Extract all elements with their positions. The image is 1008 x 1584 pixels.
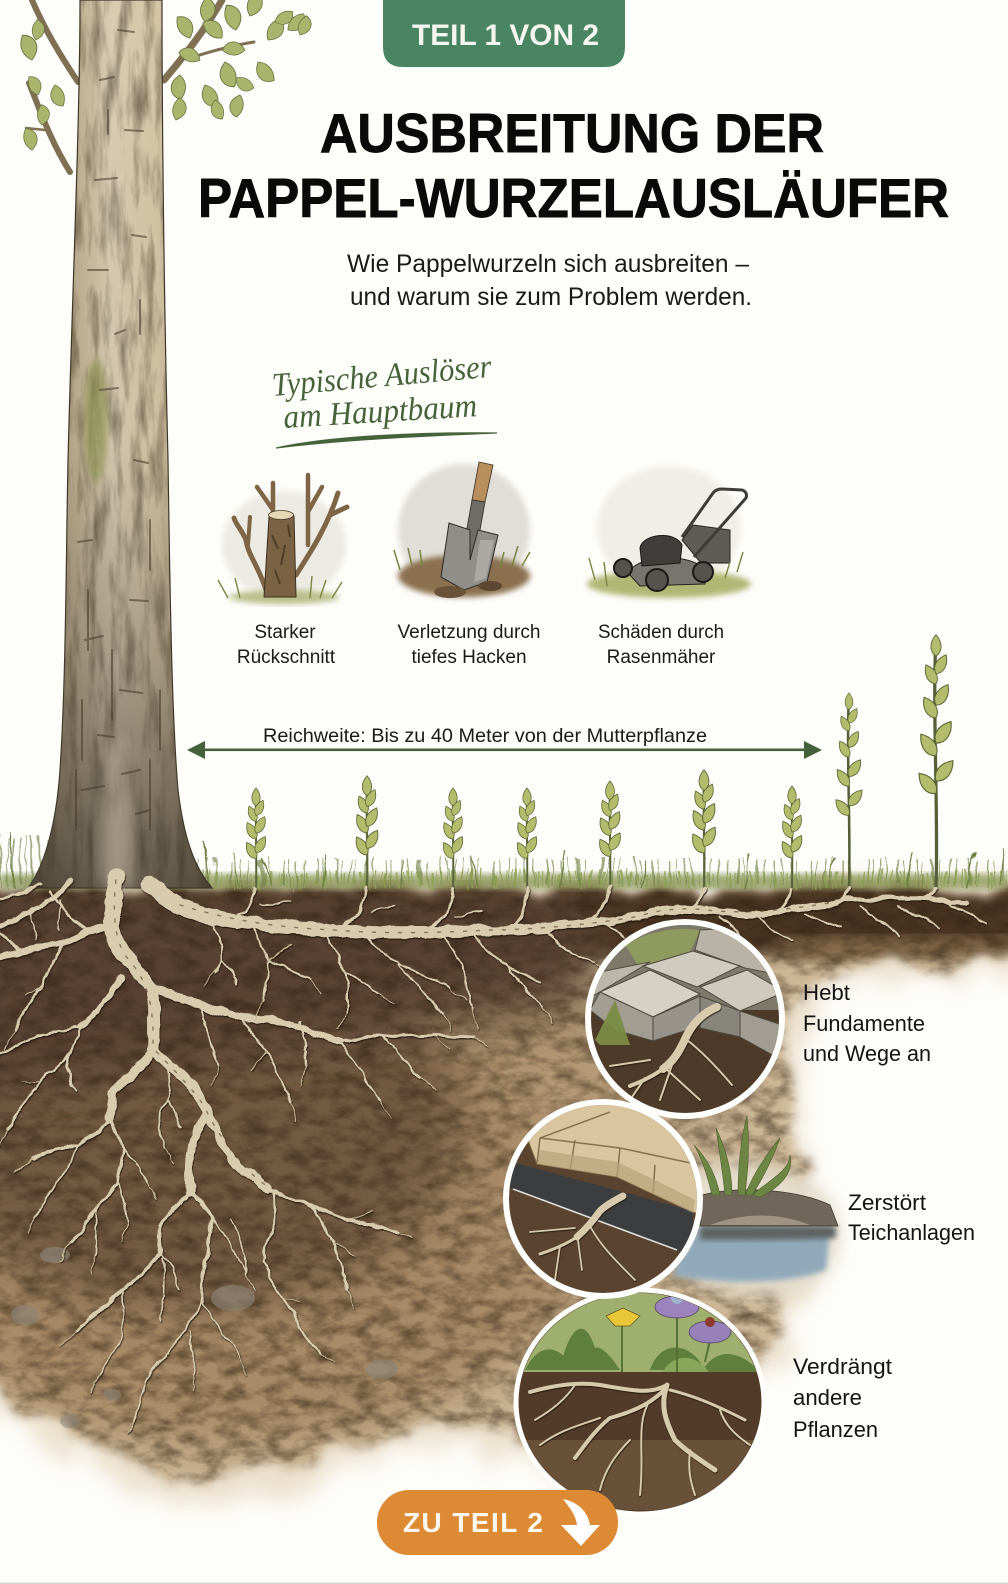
root suckers saplings <box>243 635 958 888</box>
flowers <box>606 1292 731 1343</box>
trigger label 2: tiefes Hacken <box>411 647 527 668</box>
effect label 2: Zerstört <box>848 1190 926 1215</box>
root flares from trunk base <box>0 882 72 940</box>
next part button: ZU TEIL 2 <box>403 1507 543 1538</box>
icon: pruned stump <box>218 475 347 604</box>
next part button <box>377 1490 618 1555</box>
moss patch <box>84 358 108 482</box>
effect label 1: Hebt <box>803 980 850 1005</box>
inset: pond liner <box>505 1100 700 1296</box>
trigger label 3: Rasenmäher <box>607 647 716 668</box>
bark marks <box>76 30 160 830</box>
handwritten heading: triggers <box>271 349 497 448</box>
icon: spade <box>394 462 530 598</box>
title: PAPPEL-WURZELAUSLÄUFER <box>198 167 949 229</box>
trigger label 1 <box>237 622 336 668</box>
trigger label 3 <box>598 622 724 668</box>
handwritten heading: triggers: Typische Auslöser <box>271 349 493 404</box>
taproot <box>77 876 397 1421</box>
circle ring <box>588 922 782 1116</box>
inset: pond surroundings <box>672 1116 840 1297</box>
inset: plants and roots <box>514 1288 765 1512</box>
left lower branches <box>33 1048 182 1255</box>
ellipse ring <box>516 1290 764 1514</box>
effect label 3: andere <box>793 1385 862 1410</box>
effect label 2: Teichanlagen <box>848 1220 975 1245</box>
trigger label 1: Starker <box>254 622 316 643</box>
upper right branch <box>155 990 473 1100</box>
handwritten heading: triggers: am Hauptbaum <box>282 388 478 436</box>
icon: curved arrow <box>561 1499 600 1546</box>
trigger label 2: Verletzung durch <box>398 622 540 643</box>
ground grass <box>0 832 1008 889</box>
runner side branches <box>212 900 984 1013</box>
soil cross-section <box>0 880 1008 1518</box>
effect label 3: Pflanzen <box>793 1417 878 1442</box>
main poplar tree <box>19 0 315 890</box>
part badge: TEIL 1 VON 2 <box>412 19 599 52</box>
pale root flare on trunk <box>100 740 134 888</box>
inset: lifted paving <box>585 920 785 1116</box>
range label: Reichweite: Bis zu 40 Meter von der Mutterpflanze <box>263 725 707 747</box>
root system <box>0 876 984 1432</box>
horizontal runner root <box>150 884 965 933</box>
range arrow <box>187 741 822 759</box>
effect label 1: und Wege an <box>803 1041 931 1066</box>
trigger label 3: Schäden durch <box>598 622 724 643</box>
branches <box>26 0 254 172</box>
icon: lawn mower <box>587 466 751 598</box>
effect label 1: Fundamente <box>803 1011 925 1036</box>
subtitle: Wie Pappelwurzeln sich ausbreiten – <box>347 250 749 278</box>
leaves <box>19 0 315 151</box>
trunk <box>28 0 212 888</box>
effect label 2 <box>848 1190 975 1245</box>
bottom edge line <box>0 1582 1008 1584</box>
trunk lower shading <box>28 0 212 888</box>
bark texture <box>46 0 186 887</box>
bark dashes on main roots <box>114 880 836 1186</box>
fine rootlets <box>0 945 610 1432</box>
title: AUSBREITUNG DER <box>320 102 824 164</box>
subtitle <box>347 250 752 311</box>
effect label 1 <box>803 980 931 1066</box>
trigger label 2 <box>398 622 540 668</box>
left branches <box>0 892 122 1130</box>
part badge <box>383 0 625 67</box>
title <box>198 102 949 229</box>
effect label 3: Verdrängt <box>793 1354 892 1379</box>
trigger label 1: Rückschnitt <box>237 647 336 668</box>
effect label 3 <box>793 1354 892 1442</box>
subtitle: und warum sie zum Problem werden. <box>350 283 752 311</box>
